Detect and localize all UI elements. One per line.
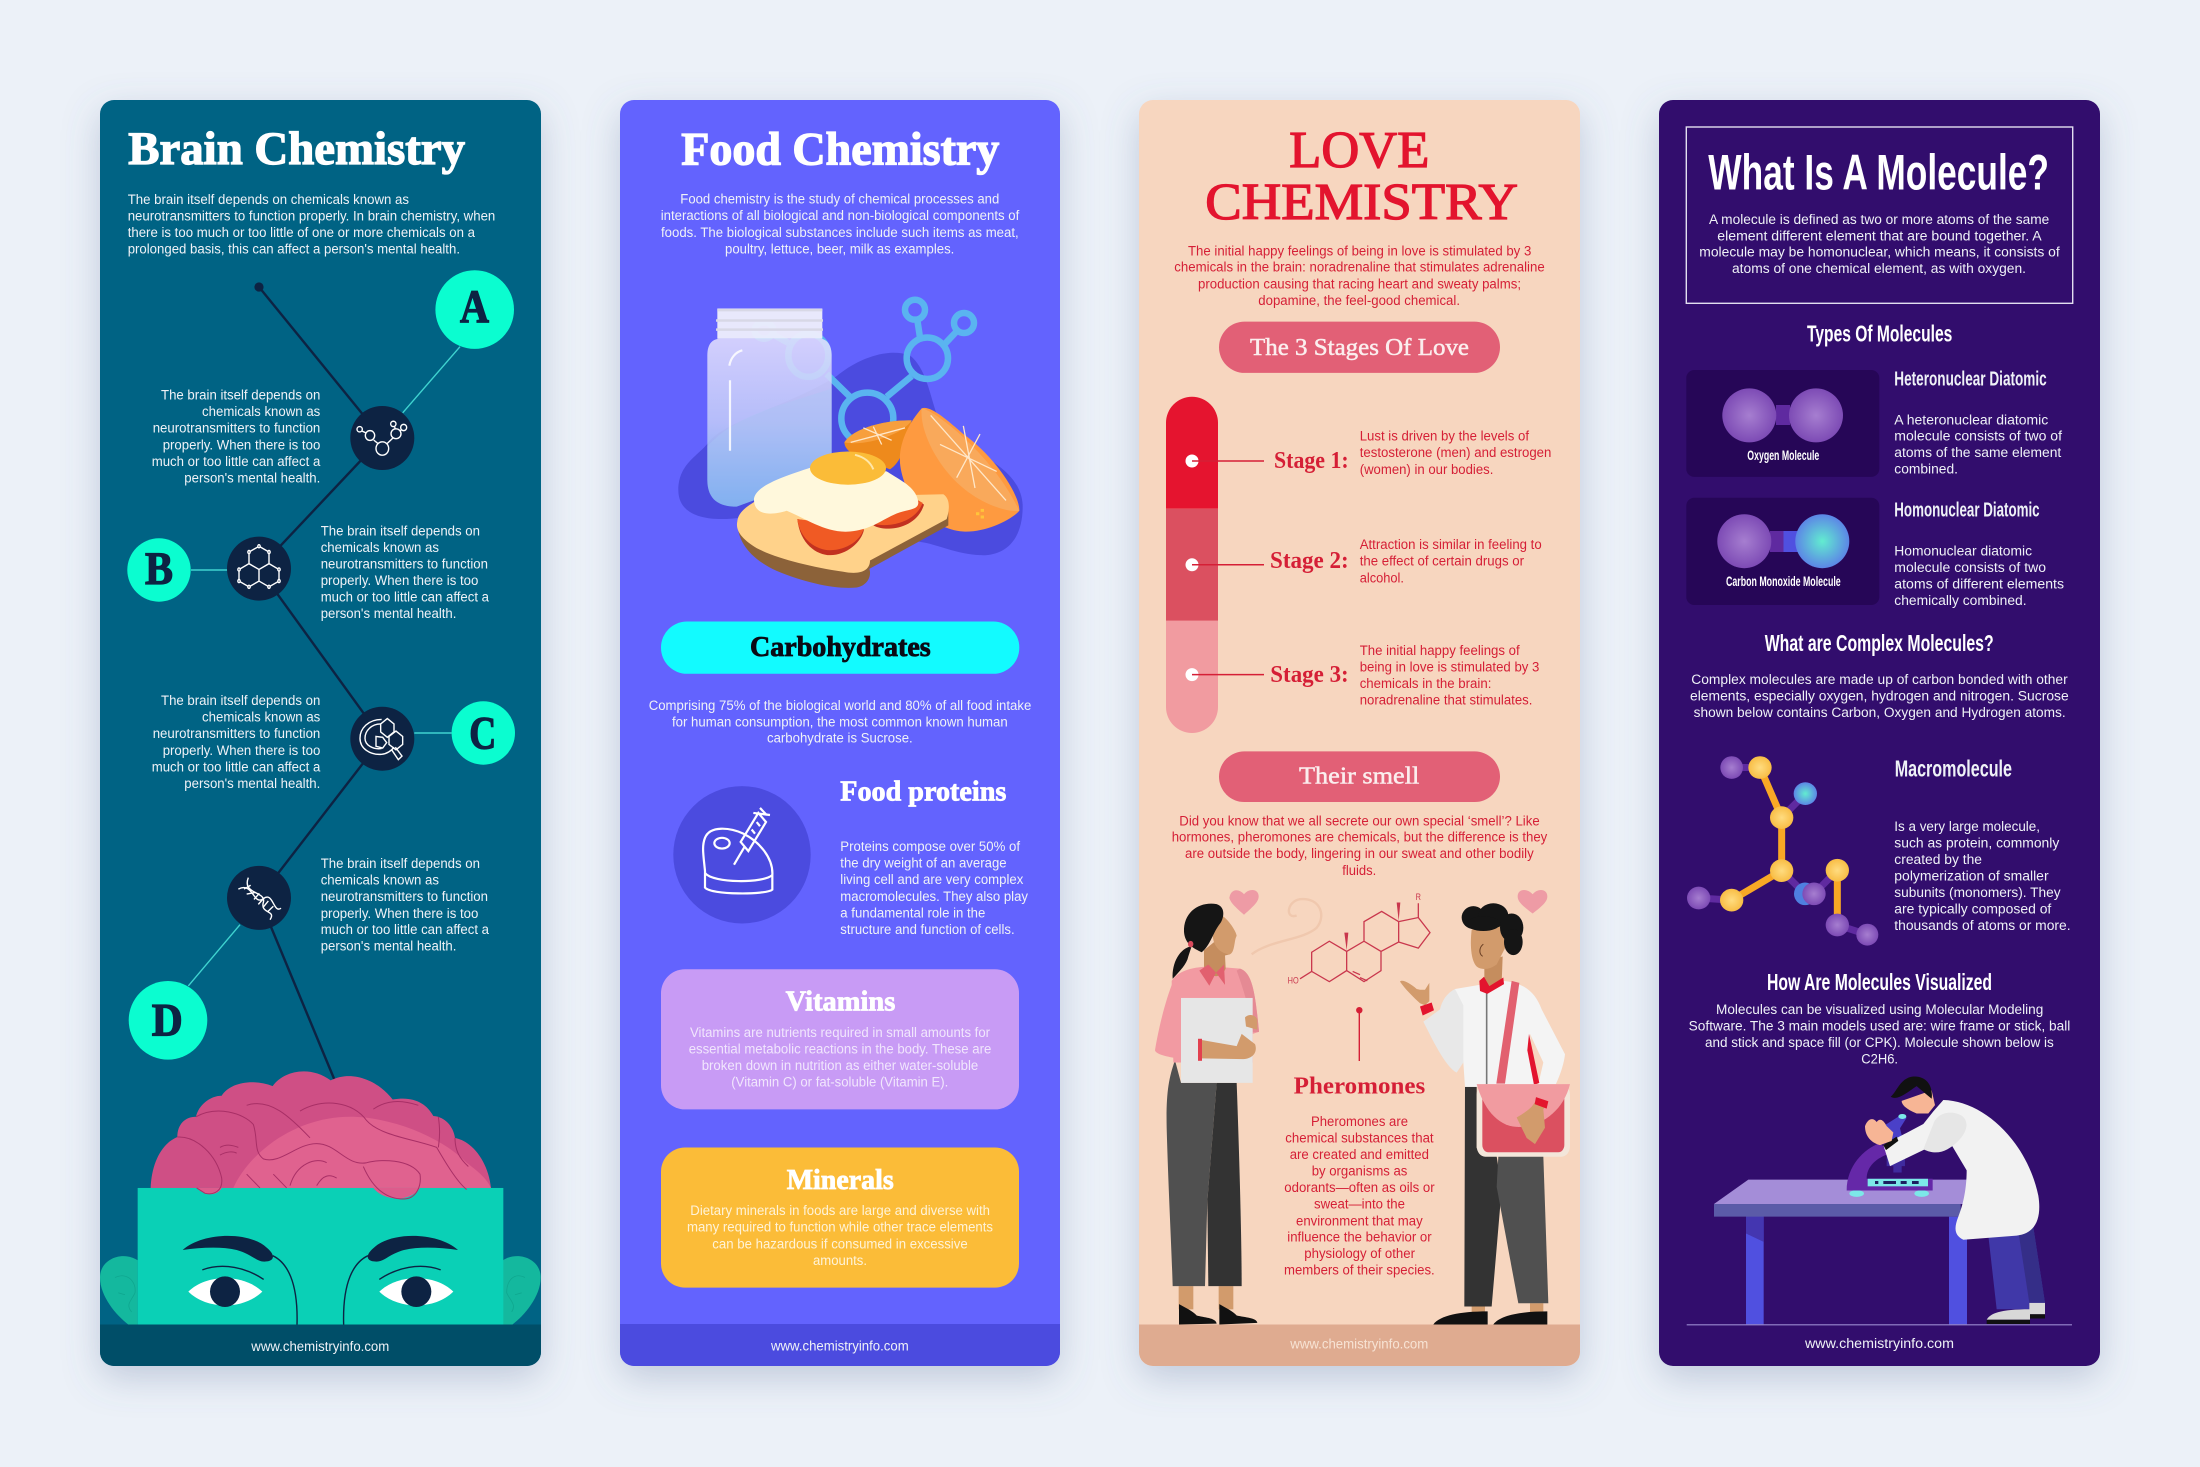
intro text: prolonged basis, this can affect a person's mental health. xyxy=(128,241,460,256)
macromolecule text: polymerization of smaller xyxy=(1894,868,2049,883)
footer bar xyxy=(100,1324,541,1366)
footer bar xyxy=(1139,1324,1580,1366)
pill: their smell xyxy=(1219,751,1500,802)
footer url: www.chemistryinfo.com xyxy=(1804,1336,1954,1351)
intro text: poultry, lettuce, beer, milk as examples. xyxy=(725,241,954,256)
illustration: steroid molecule: HO xyxy=(1288,976,1299,986)
their smell text: fluids. xyxy=(1342,863,1376,878)
footer url: www.chemistryinfo.com xyxy=(770,1339,909,1354)
text block D: neurotransmitters to function xyxy=(321,889,488,904)
text block A xyxy=(152,387,321,485)
intro text: neurotransmitters to function properly. In brain chemistry, when xyxy=(128,208,495,223)
stage 2 xyxy=(1270,537,1542,585)
panel background xyxy=(620,100,1060,1366)
icon: magnifier with molecules xyxy=(350,707,414,771)
text block D: properly. When there is too xyxy=(321,906,478,921)
homonuclear diatomic xyxy=(1894,500,2064,608)
text block A: chemicals known as xyxy=(202,404,321,419)
footer url: www.chemistryinfo.com xyxy=(1289,1337,1428,1352)
heading: types of molecules: Types Of Molecules xyxy=(1807,320,1952,346)
panel background xyxy=(1659,100,2100,1366)
carbohydrates text xyxy=(649,698,1031,745)
heteronuclear diatomic: A heteronuclear diatomic xyxy=(1894,412,2049,427)
footer bar xyxy=(620,1324,1060,1366)
pheromones text: by organisms as xyxy=(1312,1164,1408,1178)
badge D xyxy=(129,981,207,1060)
homonuclear diatomic: chemically combined. xyxy=(1894,593,2027,608)
illustration: steroid molecule xyxy=(1252,892,1430,986)
their smell text xyxy=(1172,813,1548,878)
intro text xyxy=(661,192,1020,256)
intro text: molecule may be homonuclear, which means, it consists of xyxy=(1699,245,2060,260)
card: oxygen molecule xyxy=(1686,370,1879,477)
card: vitamins: essential metabolic reactions in the body. These are xyxy=(689,1041,991,1056)
card: vitamins: Vitamins are nutrients required in small amounts for xyxy=(690,1025,990,1040)
stage 2: alcohol. xyxy=(1360,570,1404,585)
text block A: neurotransmitters to function xyxy=(153,420,320,435)
text block D xyxy=(321,856,489,954)
icon: dna xyxy=(227,866,291,930)
intro text: foods. The biological substances include such items as meat, xyxy=(661,225,1019,240)
illustration: brain and face xyxy=(100,1071,541,1325)
intro text: Food chemistry is the study of chemical processes and xyxy=(680,192,999,207)
food proteins text xyxy=(840,839,1028,937)
text block C: chemicals known as xyxy=(202,710,321,725)
stage 3: The initial happy feelings of xyxy=(1360,643,1520,658)
illustration: scientist at microscope xyxy=(1714,1076,2045,1324)
macromolecule text: such as protein, commonly xyxy=(1894,836,2060,850)
text block C: properly. When there is too xyxy=(163,743,320,758)
intro text: element different element that are bound together. A xyxy=(1717,228,2042,243)
heading: how are molecules visualized: How Are Molecules Visualized xyxy=(1767,969,1992,995)
pheromones text: Pheromones are xyxy=(1311,1114,1408,1129)
panel: food chemistry xyxy=(620,100,1060,1366)
pill: carbohydrates: Carbohydrates xyxy=(750,632,931,663)
pheromones text: influence the behavior or xyxy=(1287,1230,1432,1245)
text block D: chemicals known as xyxy=(321,872,439,888)
text block B: person's mental health. xyxy=(321,606,456,621)
text block C: person's mental health. xyxy=(184,776,320,791)
timeline connector lines xyxy=(188,282,460,1081)
pheromones text: sweat—into the xyxy=(1314,1197,1405,1212)
text block A: much or too little can affect a xyxy=(152,454,321,469)
text block C: The brain itself depends on xyxy=(161,693,320,708)
stage 3: Stage 3: xyxy=(1270,662,1349,688)
card: minerals xyxy=(661,1148,1019,1288)
pheromones text: members of their species. xyxy=(1284,1263,1435,1278)
illustration: milk jar, egg toast, oranges xyxy=(678,300,1023,588)
card: vitamins: broken down in nutrition as either water-soluble xyxy=(702,1058,978,1073)
homonuclear diatomic: molecule consists of two xyxy=(1894,560,2046,575)
callout pin xyxy=(1356,1007,1363,1061)
their smell text: are outside the body, lingering in our sweat and other bodily xyxy=(1185,846,1534,861)
card: minerals: Minerals xyxy=(787,1165,894,1196)
intro text: interactions of all biological and non-biological components of xyxy=(661,208,1020,223)
stage 3: being in love is stimulated by 3 xyxy=(1360,660,1539,675)
title frame xyxy=(1686,127,2073,303)
heteronuclear diatomic: combined. xyxy=(1894,462,1958,477)
homonuclear diatomic: atoms of different elements xyxy=(1894,577,2064,592)
pill: carbohydrates xyxy=(661,622,1019,674)
carbohydrates text: Comprising 75% of the biological world and 80% of all food intake xyxy=(649,698,1031,713)
icon: molecule xyxy=(350,406,414,470)
card: vitamins: Vitamins xyxy=(786,987,895,1018)
footer url: www.chemistryinfo.com xyxy=(250,1339,389,1354)
text block A: The brain itself depends on xyxy=(161,387,320,402)
icon: hexagon ring xyxy=(227,537,291,601)
homonuclear diatomic: Homonuclear Diatomic xyxy=(1894,500,2040,522)
card: vitamins: (Vitamin C) or fat-soluble (Vitamin E). xyxy=(731,1075,948,1090)
their smell text: Did you know that we all secrete our own special ‘smell’? Like xyxy=(1179,813,1540,828)
heteronuclear diatomic: molecule consists of two of xyxy=(1894,429,2062,444)
intro text: A molecule is defined as two or more atoms of the same xyxy=(1709,212,2049,227)
food proteins text: a fundamental role in the xyxy=(840,905,985,920)
text block B xyxy=(321,524,489,621)
macromolecule text xyxy=(1894,755,2071,933)
badge A xyxy=(435,270,514,349)
thermometer stage bar xyxy=(1166,397,1264,733)
text block C xyxy=(152,693,321,791)
text block B: properly. When there is too xyxy=(321,573,478,588)
text block D: person's mental health. xyxy=(321,939,456,954)
pill: the 3 stages of love xyxy=(1219,322,1500,373)
macromolecule text: Is a very large molecule, xyxy=(1894,819,2040,834)
carbohydrates text: carbohydrate is Sucrose. xyxy=(767,730,913,745)
title: CHEMISTRY xyxy=(1205,174,1518,231)
stage 1: (women) in our bodies. xyxy=(1360,462,1493,477)
visualization text: Software. The 3 main models used are: wire frame or stick, ball xyxy=(1689,1019,2070,1034)
text block B: much or too little can affect a xyxy=(321,590,489,605)
stage 2: Attraction is similar in feeling to xyxy=(1360,537,1542,552)
card: carbon monoxide molecule: Carbon Monoxide Molecule xyxy=(1726,573,1841,589)
badge B xyxy=(127,538,191,602)
badge D: D xyxy=(152,995,183,1047)
card: vitamins xyxy=(661,969,1019,1109)
title: Food Chemistry xyxy=(681,124,1000,176)
pheromones text: are created and emitted xyxy=(1290,1147,1429,1162)
ground line xyxy=(1687,1324,2072,1326)
illustration: macromolecule xyxy=(1687,756,1878,946)
stage 1: Stage 1: xyxy=(1274,448,1349,474)
visualization text: Molecules can be visualized using Molecular Modeling xyxy=(1716,1002,2043,1017)
text block A: properly. When there is too xyxy=(163,437,320,452)
intro text xyxy=(1699,212,2060,276)
macromolecule text: are typically composed of xyxy=(1894,902,2052,917)
intro text: The initial happy feelings of being in love is stimulated by 3 xyxy=(1188,243,1531,258)
illustration: woman xyxy=(1155,890,1259,1324)
badge C: C xyxy=(469,708,496,760)
complex molecules text: Complex molecules are made up of carbon bonded with other xyxy=(1691,672,2068,687)
pill: the 3 stages of love: The 3 Stages Of Love xyxy=(1250,335,1469,361)
icon: meat with syringe xyxy=(673,786,811,924)
panel background xyxy=(100,100,541,1366)
title xyxy=(1205,122,1518,231)
stage 1: testosterone (men) and estrogen xyxy=(1360,445,1551,460)
intro text: there is too much or too little of one or more chemicals on a xyxy=(128,225,475,240)
food proteins text: living cell and are very complex xyxy=(840,872,1024,887)
text block B: neurotransmitters to function xyxy=(321,557,488,572)
stage 2: the effect of certain drugs or xyxy=(1360,554,1524,569)
pheromones text: odorants—often as oils or xyxy=(1284,1180,1435,1195)
carbohydrates text: for human consumption, the most common known human xyxy=(672,714,1008,729)
intro text: The brain itself depends on chemicals known as xyxy=(128,192,409,207)
badge C xyxy=(452,701,515,765)
title: Brain Chemistry xyxy=(128,123,465,175)
text block D: The brain itself depends on xyxy=(321,856,480,871)
panel: brain chemistry xyxy=(100,100,541,1366)
visualization text: C2H6. xyxy=(1861,1051,1898,1066)
stage 3: noradrenaline that stimulates. xyxy=(1360,692,1532,708)
heading: complex molecules: What are Complex Molecules? xyxy=(1765,630,1994,656)
badge A: A xyxy=(460,281,489,333)
stage 2: Stage 2: xyxy=(1270,548,1349,574)
text block D: much or too little can affect a xyxy=(321,922,489,937)
intro text: atoms of one chemical element, as with oxygen. xyxy=(1732,261,2026,276)
macromolecule text: thousands of atoms or more. xyxy=(1894,918,2071,933)
pheromones text: environment that may xyxy=(1296,1213,1423,1228)
card: carbon monoxide molecule xyxy=(1686,498,1879,605)
visualization text xyxy=(1689,1002,2070,1066)
visualization text: and stick and space fill (or CPK). Molecule shown below is xyxy=(1705,1035,2054,1050)
card: minerals: many required to function while other trace elements xyxy=(687,1220,993,1235)
food proteins text: the dry weight of an average xyxy=(840,856,1007,871)
panel: love chemistry xyxy=(1139,100,1580,1366)
panel background xyxy=(1139,100,1580,1366)
stage 3: chemicals in the brain: xyxy=(1360,676,1491,691)
intro text: chemicals in the brain: noradrenaline that stimulates adrenaline xyxy=(1174,260,1545,275)
intro text xyxy=(128,192,495,256)
badge B: B xyxy=(145,543,173,595)
card: oxygen molecule: Oxygen Molecule xyxy=(1747,447,1819,463)
food proteins text: structure and function of cells. xyxy=(840,922,1015,937)
food proteins text: macromolecules. They also play xyxy=(840,889,1028,904)
complex molecules text: shown below contains Carbon, Oxygen and Hydrogen atoms. xyxy=(1694,705,2066,720)
pill: their smell: Their smell xyxy=(1299,764,1420,790)
homonuclear diatomic: Homonuclear diatomic xyxy=(1894,544,2032,559)
illustration: man xyxy=(1400,890,1570,1324)
their smell text: hormones, pheromones are chemicals, but the difference is they xyxy=(1172,830,1548,845)
text block A: person's mental health. xyxy=(184,470,320,485)
stage 1: Lust is driven by the levels of xyxy=(1360,428,1529,443)
card: minerals: Dietary minerals in foods are large and diverse with xyxy=(690,1203,990,1218)
heteronuclear diatomic: atoms of the same element xyxy=(1894,445,2062,460)
pheromones text xyxy=(1284,1114,1435,1278)
macromolecule text: created by the xyxy=(1894,852,1982,867)
food proteins text: Proteins compose over 50% of xyxy=(840,839,1020,854)
pheromones heading: Pheromones xyxy=(1294,1074,1425,1100)
complex molecules text: elements, especially oxygen, hydrogen and nitrogen. Sucrose xyxy=(1690,688,2069,703)
heteronuclear diatomic xyxy=(1894,369,2062,477)
intro text: dopamine, the feel-good chemical. xyxy=(1258,293,1460,308)
intro text: production causing that racing heart and sweaty palms; xyxy=(1198,276,1521,291)
text block C: neurotransmitters to function xyxy=(153,726,320,741)
macromolecule text: subunits (monomers). They xyxy=(1894,885,2061,900)
food proteins heading: Food proteins xyxy=(840,776,1006,808)
panel: what is a molecule xyxy=(1659,100,2100,1366)
text block B: chemicals known as xyxy=(321,540,439,555)
text block B: The brain itself depends on xyxy=(321,524,480,538)
pheromones text: physiology of other xyxy=(1304,1246,1415,1261)
illustration: steroid molecule: R xyxy=(1416,892,1421,902)
card: minerals: can be hazardous if consumed in excessive xyxy=(712,1236,968,1251)
title: LOVE xyxy=(1289,122,1429,179)
text block C: much or too little can affect a xyxy=(152,760,321,775)
macromolecule text: Macromolecule xyxy=(1895,755,2012,781)
card: minerals: amounts. xyxy=(813,1253,867,1268)
heteronuclear diatomic: Heteronuclear Diatomic xyxy=(1894,369,2047,391)
title: What Is A Molecule? xyxy=(1708,145,2049,201)
pheromones text: chemical substances that xyxy=(1285,1130,1434,1145)
intro text xyxy=(1174,243,1545,308)
stage 3 xyxy=(1270,643,1539,708)
stage 1 xyxy=(1274,428,1551,477)
complex molecules text xyxy=(1690,672,2069,720)
